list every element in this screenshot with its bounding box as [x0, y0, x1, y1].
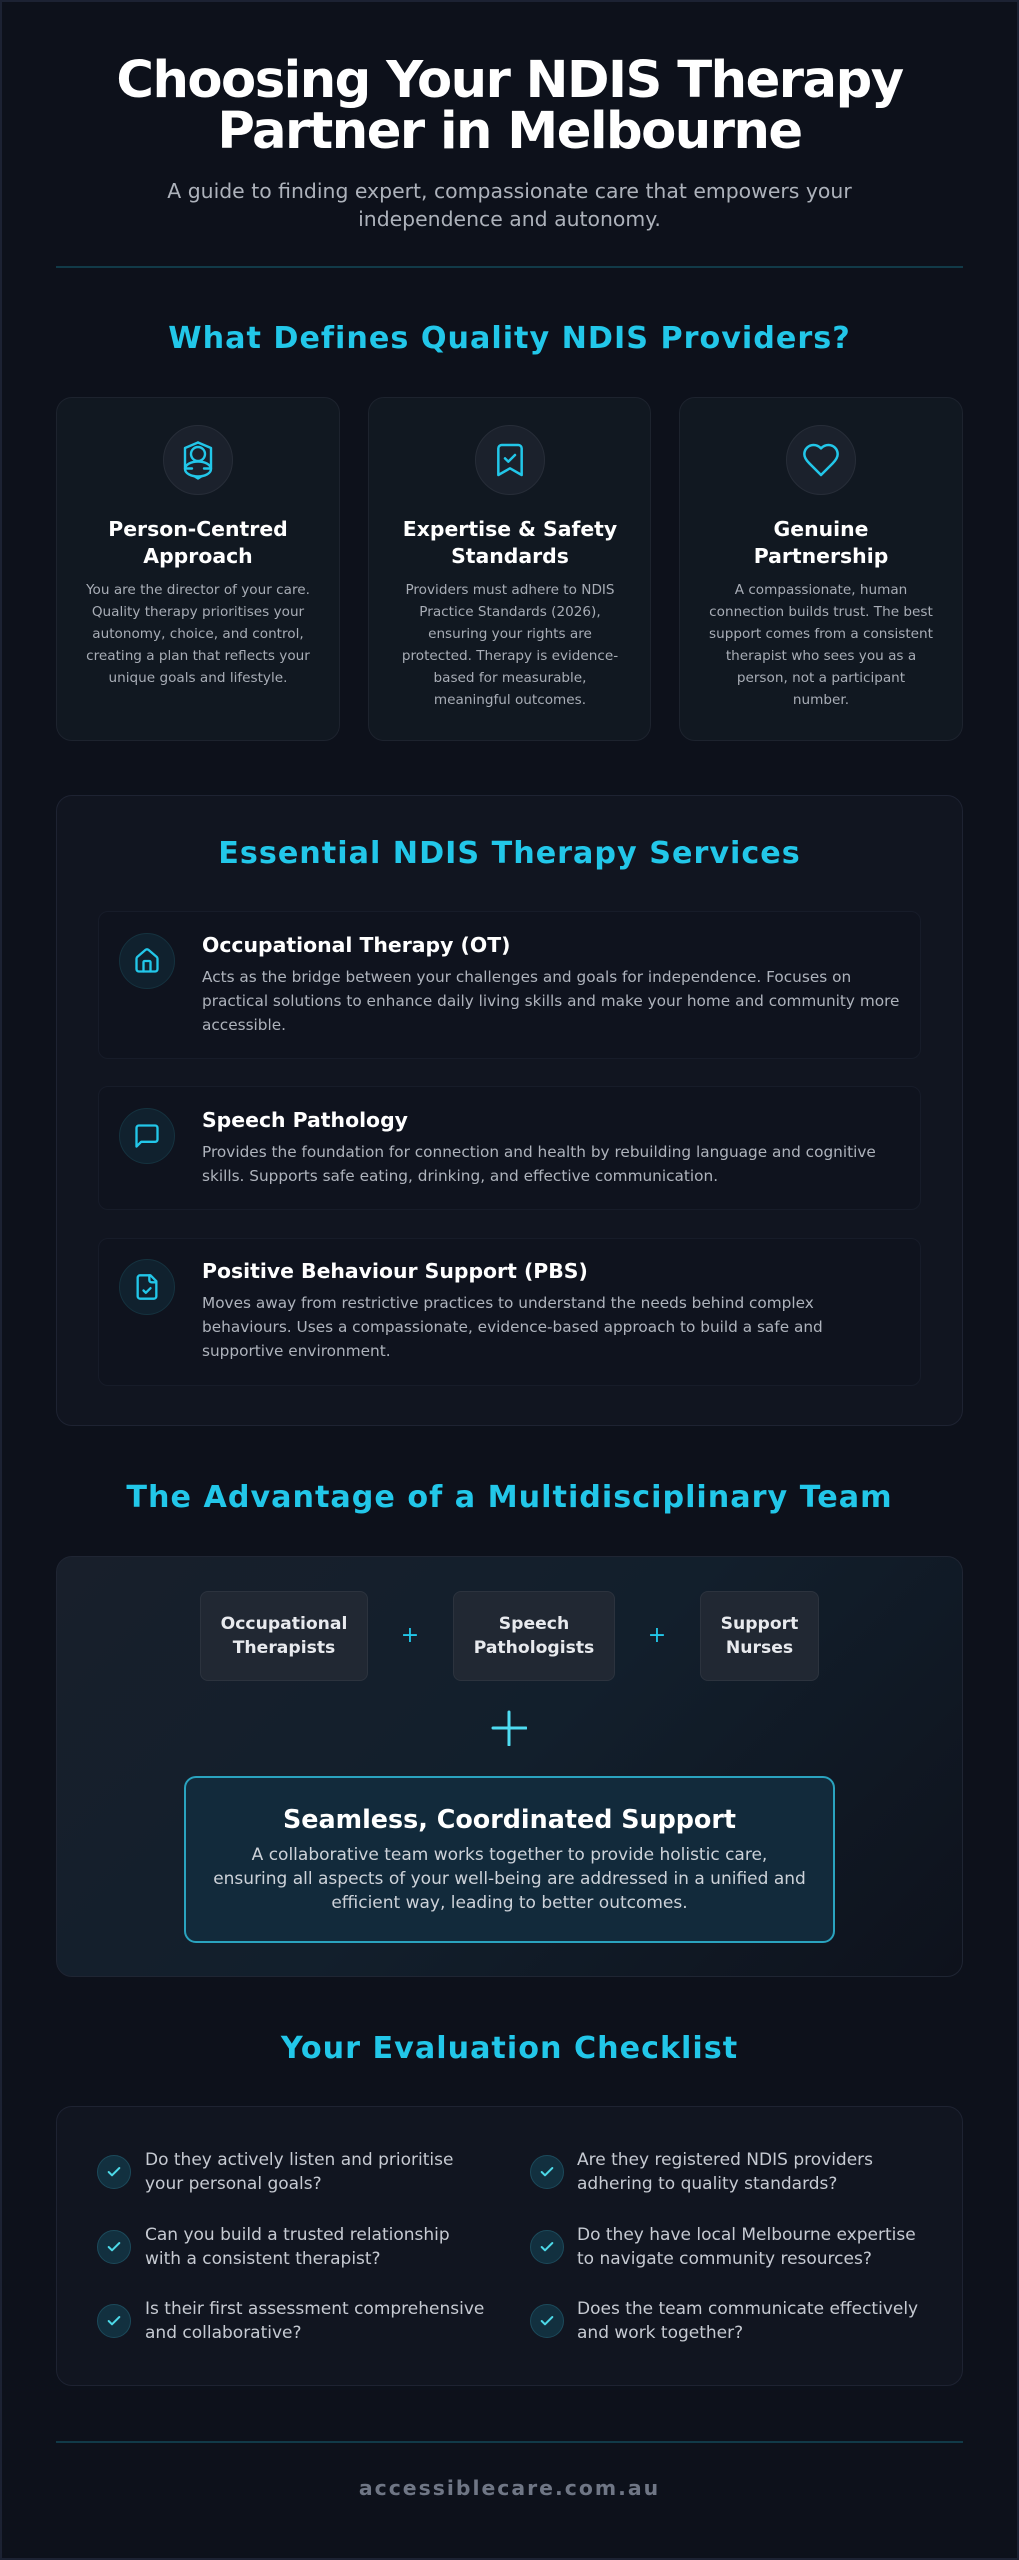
seamless text — [213, 1845, 806, 1913]
service item: occupational therapy — [98, 911, 921, 1059]
card heading: person-centred: Approach — [143, 544, 253, 568]
divider — [56, 2441, 963, 2443]
check icon 1 — [97, 2155, 131, 2189]
team box: OTs: Occupational — [221, 1614, 347, 1634]
card heading: partnership — [754, 517, 888, 568]
check icon 5 — [530, 2230, 564, 2264]
service text: OT: practical solutions to enhance daily living skills and make your home and community more — [202, 992, 899, 1010]
check text 6 — [577, 2299, 918, 2343]
check text 1: Do they actively listen and prioritise — [145, 2150, 453, 2170]
card text: expertise: ensuring your rights are — [428, 626, 592, 642]
service title: PBS: Positive Behaviour Support (PBS) — [202, 1259, 588, 1283]
service text: OT: accessible. — [202, 1016, 286, 1034]
check icon 4 — [530, 2155, 564, 2189]
icon: file check — [119, 1259, 175, 1315]
card text: partnership: therapist who sees you as a — [726, 648, 916, 664]
card text: expertise: meaningful outcomes. — [434, 692, 586, 708]
check text 1: your personal goals? — [145, 2174, 322, 2194]
team box: OTs: Therapists — [233, 1638, 335, 1658]
seamless text: efficient way, leading to better outcomes. — [331, 1893, 688, 1913]
check text 2: with a consistent therapist? — [145, 2249, 381, 2269]
check text 2 — [145, 2225, 450, 2269]
heading: checklist: Your Evaluation Checklist — [281, 2031, 738, 2066]
panel: expertise card — [368, 397, 651, 741]
team box: speech pathologists — [453, 1591, 615, 1681]
icon: bookmark check — [475, 425, 545, 495]
subtitle — [167, 179, 852, 230]
card text: person-centred: Quality therapy prioritises your — [92, 604, 304, 620]
panel: person-centred card — [56, 397, 340, 741]
check text 3: and collaborative? — [145, 2323, 302, 2343]
footer: accessiblecare.com.au — [359, 2476, 660, 2500]
team box: nurses: Nurses — [726, 1638, 793, 1658]
subtitle: A guide to finding expert, compassionate care that empowers your — [167, 179, 852, 203]
card text: expertise — [402, 582, 618, 708]
seamless text: A collaborative team works together to provide holistic care, — [252, 1845, 767, 1865]
card heading: partnership: Partnership — [754, 544, 888, 568]
panel: team — [56, 1556, 963, 1977]
card text: person-centred: creating a plan that reflects your — [86, 648, 310, 664]
check text 3 — [145, 2299, 484, 2343]
icon: heart — [786, 425, 856, 495]
card heading: person-centred — [108, 517, 288, 568]
plus: + — [401, 1623, 419, 1648]
panel: partnership card — [679, 397, 963, 741]
check text 5: Do they have local Melbourne expertise — [577, 2225, 916, 2245]
service title: OT: Occupational Therapy (OT) — [202, 933, 510, 957]
service title: speech: Speech Pathology — [202, 1108, 408, 1132]
seamless text: ensuring all aspects of your well-being are addressed in a unified and — [213, 1869, 806, 1889]
title — [116, 50, 904, 161]
check text 6: and work together? — [577, 2323, 743, 2343]
service text: PBS: supportive environment. — [202, 1342, 391, 1360]
check icon 2 — [97, 2230, 131, 2264]
card text: person-centred: You are the director of your care. — [86, 582, 310, 598]
seamless heading: Seamless, Coordinated Support — [283, 1804, 736, 1834]
team box: OTs — [200, 1591, 368, 1681]
panel: services — [56, 795, 963, 1426]
card text: person-centred: autonomy, choice, and control, — [92, 626, 304, 642]
card heading: expertise: Standards — [451, 544, 569, 568]
card text: expertise: protected. Therapy is evidence- — [402, 648, 618, 664]
card text: person-centred — [86, 582, 310, 686]
check text 4: Are they registered NDIS providers — [577, 2150, 873, 2170]
card heading: partnership: Genuine — [774, 517, 868, 541]
panel: seamless support — [184, 1776, 835, 1943]
service text: OT — [202, 968, 899, 1034]
heading: multidisciplinary team: The Advantage of a Multidisciplinary Team — [126, 1480, 893, 1515]
card text: expertise: based for measurable, — [433, 670, 586, 686]
card text: partnership: A compassionate, human — [735, 582, 907, 598]
card text: expertise: Practice Standards (2026), — [419, 604, 601, 620]
check text 6: Does the team communicate effectively — [577, 2299, 918, 2319]
check text 4 — [577, 2150, 873, 2194]
icon: speech bubble — [119, 1108, 175, 1164]
card text: partnership: person, not a participant — [737, 670, 905, 686]
check text 4: adhering to quality standards? — [577, 2174, 837, 2194]
plus: + — [648, 1623, 666, 1648]
team box: speech pathologists: Speech — [499, 1614, 569, 1634]
team box: nurses: Support — [721, 1614, 798, 1634]
heading: what defines quality: What Defines Quality NDIS Providers? — [168, 321, 851, 356]
check text 2: Can you build a trusted relationship — [145, 2225, 450, 2245]
service item: speech pathology — [98, 1086, 921, 1210]
icon: person shield — [163, 425, 233, 495]
check icon 3 — [97, 2304, 131, 2338]
divider — [56, 266, 963, 268]
card text: person-centred: unique goals and lifestyle. — [109, 670, 287, 686]
heading: services: Essential NDIS Therapy Services — [218, 836, 801, 871]
team box: nurses — [700, 1591, 819, 1681]
check text 5: to navigate community resources? — [577, 2249, 872, 2269]
service text: speech — [202, 1143, 876, 1185]
card heading: expertise: Expertise & Safety — [403, 517, 617, 541]
service text: speech: Provides the foundation for connection and health by rebuilding language and cognitive — [202, 1143, 876, 1161]
check text 5 — [577, 2225, 916, 2269]
card heading: person-centred: Person-Centred — [108, 517, 288, 541]
title: Partner in Melbourne — [217, 101, 802, 161]
card text: partnership — [709, 582, 933, 708]
card text: partnership: number. — [793, 692, 849, 708]
card heading: expertise — [403, 517, 617, 568]
card text: partnership: support comes from a consistent — [709, 626, 933, 642]
check text 3: Is their first assessment comprehensive — [145, 2299, 484, 2319]
service text: PBS: behaviours. Uses a compassionate, evidence-based approach to build a safe and — [202, 1318, 823, 1336]
icon: home — [119, 933, 175, 989]
service text: PBS: Moves away from restrictive practices to understand the needs behind complex — [202, 1294, 814, 1312]
card text: expertise: Providers must adhere to NDIS — [405, 582, 615, 598]
card text: partnership: connection builds trust. The best — [709, 604, 933, 620]
service text: speech: skills. Supports safe eating, drinking, and effective communication. — [202, 1167, 718, 1185]
service item: PBS — [98, 1238, 921, 1386]
check icon 6 — [530, 2304, 564, 2338]
team box: speech pathologists: Pathologists — [474, 1638, 594, 1658]
panel: checklist — [56, 2106, 963, 2386]
icon: large plus — [492, 1710, 527, 1746]
service text: PBS — [202, 1294, 823, 1360]
title: Choosing Your NDIS Therapy — [116, 50, 903, 110]
subtitle: independence and autonomy. — [358, 206, 661, 230]
check text 1 — [145, 2150, 453, 2194]
service text: OT: Acts as the bridge between your challenges and goals for independence. Focuses on — [202, 968, 851, 986]
